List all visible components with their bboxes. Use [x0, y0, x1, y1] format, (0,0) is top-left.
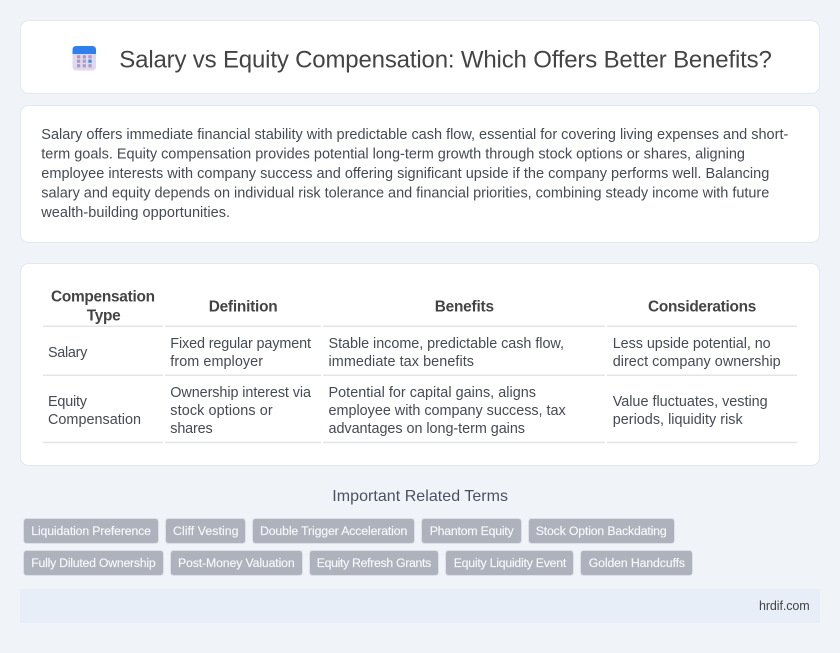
table row: salary: direct company ownership	[613, 354, 781, 370]
text block: summary paragraph: wealth-building opportunities.	[40, 205, 230, 221]
table row: equity compensation: stock options or	[170, 403, 273, 419]
table header	[51, 289, 756, 325]
tag: Phantom Equity: Phantom Equity	[430, 524, 515, 538]
table row: equity compensation: shares	[170, 421, 213, 437]
table row: equity compensation: Potential for capital gains, aligns	[328, 385, 536, 401]
footer	[20, 589, 820, 623]
heading: related terms: Important Related Terms	[332, 488, 508, 505]
tag: Post-Money Valuation	[170, 550, 302, 576]
table row: salary: immediate tax benefits	[328, 354, 474, 370]
tag: Double Trigger Acceleration	[252, 518, 414, 544]
tag: Equity Refresh Grants	[310, 550, 438, 576]
table row: equity compensation: Value fluctuates, vesting	[613, 394, 768, 410]
text block: summary paragraph: employee interests with company success and offering significant upside if the company performs well. Balancing	[41, 166, 769, 182]
tag: Liquidation Preference: Liquidation Preference	[31, 524, 151, 538]
table row: salary: Stable income, predictable cash flow,	[328, 336, 564, 352]
text block: summary paragraph: Salary offers immediate financial stability with predictable cash flow, essential for covering living expenses and short-	[41, 127, 788, 143]
panel: related term tags	[24, 518, 692, 576]
tag: Stock Option Backdating: Stock Option Backdating	[536, 524, 667, 538]
table header: Considerations	[648, 299, 756, 316]
table header: Benefits	[435, 299, 494, 316]
table row: equity compensation: Compensation	[48, 412, 141, 428]
tag: Equity Liquidity Event	[446, 550, 574, 576]
table row: salary: from employer	[170, 354, 263, 370]
tag: Double Trigger Acceleration: Double Trigger Acceleration	[260, 524, 407, 538]
table row: equity compensation: Ownership interest via	[170, 385, 311, 401]
table row: equity compensation: advantages on long-term gains	[328, 421, 525, 437]
title: Salary vs Equity Compensation: Which Offers Better Benefits?	[119, 46, 772, 73]
tag: Golden Handcuffs	[580, 550, 692, 576]
tag: Fully Diluted Ownership: Fully Diluted Ownership	[31, 556, 156, 570]
tag: Post-Money Valuation: Post-Money Valuation	[178, 556, 295, 570]
panel: summary	[20, 106, 820, 242]
tag: Liquidation Preference	[24, 518, 158, 544]
panel: header	[20, 20, 820, 94]
table row: salary: Less upside potential, no	[613, 336, 771, 352]
table row: salary	[48, 336, 781, 370]
panel: comparison table	[20, 264, 820, 466]
text block: summary paragraph: salary and equity depends on individual risk tolerance and financial priorities, combining steady income with future	[41, 185, 769, 201]
tag: Cliff Vesting: Cliff Vesting	[173, 524, 239, 538]
table header: Definition	[209, 299, 278, 316]
table header: Compensation	[51, 289, 155, 306]
footer: hrdif.com	[759, 599, 810, 613]
text block: summary paragraph	[40, 127, 788, 221]
table row: salary: Fixed regular payment	[170, 336, 311, 352]
tag: Fully Diluted Ownership	[24, 550, 164, 576]
table row: equity compensation: employee with company success, tax	[328, 403, 566, 419]
text block: summary paragraph: term goals. Equity compensation provides potential long-term growth through stock options or shares, aligning	[41, 146, 745, 162]
tag: Cliff Vesting	[166, 518, 246, 544]
table row: equity compensation: periods, liquidity risk	[613, 412, 743, 428]
tag: Stock Option Backdating	[528, 518, 674, 544]
icon: calendar	[72, 46, 96, 70]
tag: Equity Liquidity Event: Equity Liquidity Event	[454, 556, 567, 570]
table row: salary: Salary	[48, 345, 88, 361]
tag: Phantom Equity	[422, 518, 522, 544]
tag: Golden Handcuffs: Golden Handcuffs	[589, 556, 685, 570]
table header: Type	[87, 308, 121, 325]
tag: Equity Refresh Grants: Equity Refresh Grants	[317, 556, 431, 570]
table row: equity compensation	[48, 385, 768, 437]
table row: equity compensation: Equity	[48, 394, 88, 410]
